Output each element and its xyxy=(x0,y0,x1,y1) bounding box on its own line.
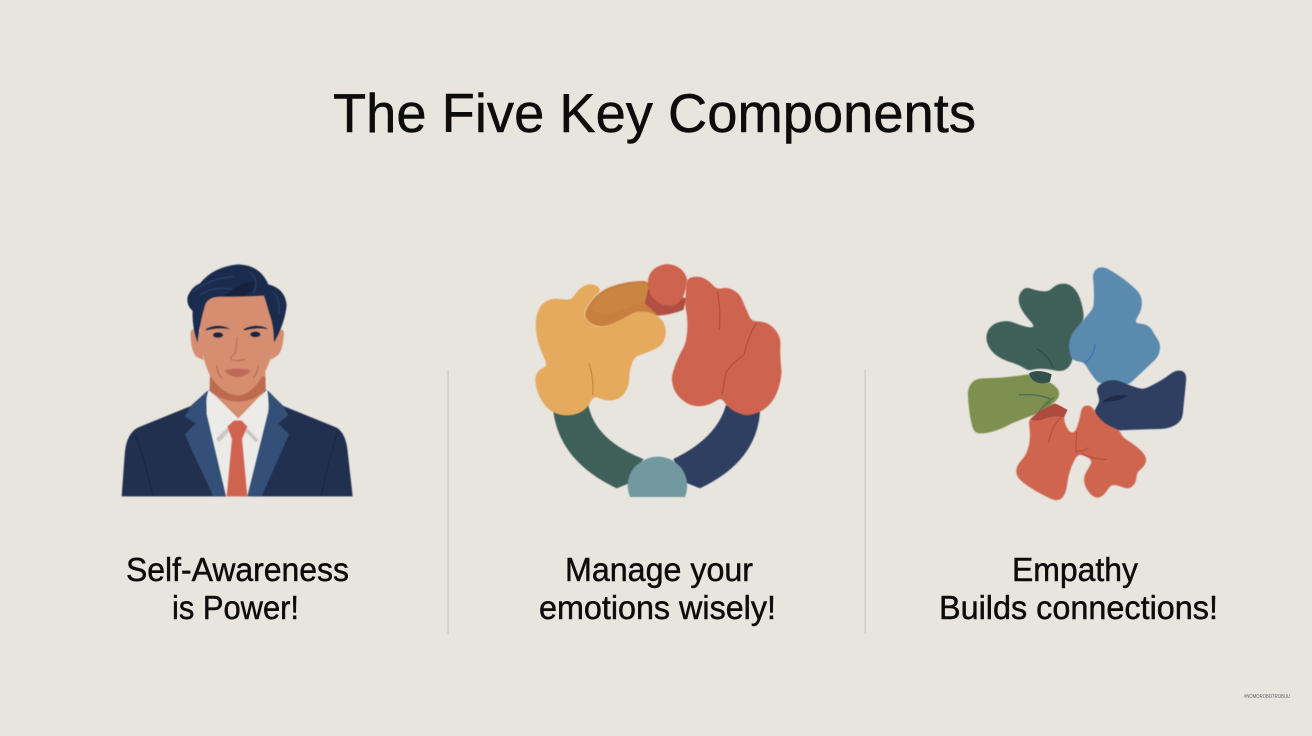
caption: self-awareness: Self-Awareness xyxy=(126,551,349,588)
caption: empathy: Empathy xyxy=(1012,551,1138,588)
caption: self-awareness: is Power! xyxy=(172,589,299,626)
footer microtext: #NOMOROBOTROBUU xyxy=(1244,694,1290,700)
caption: self-awareness xyxy=(126,551,349,626)
icon: empathy petals xyxy=(968,267,1186,501)
icon: businessman portrait xyxy=(122,264,353,496)
caption: manage emotions: Manage your xyxy=(565,551,753,588)
icon: emotions ring xyxy=(535,264,782,497)
caption: manage emotions: emotions wisely! xyxy=(539,589,776,626)
caption: manage emotions xyxy=(539,551,776,626)
title: The Five Key Components xyxy=(333,82,976,144)
caption: empathy xyxy=(939,551,1218,626)
caption: empathy: Builds connections! xyxy=(939,589,1218,626)
